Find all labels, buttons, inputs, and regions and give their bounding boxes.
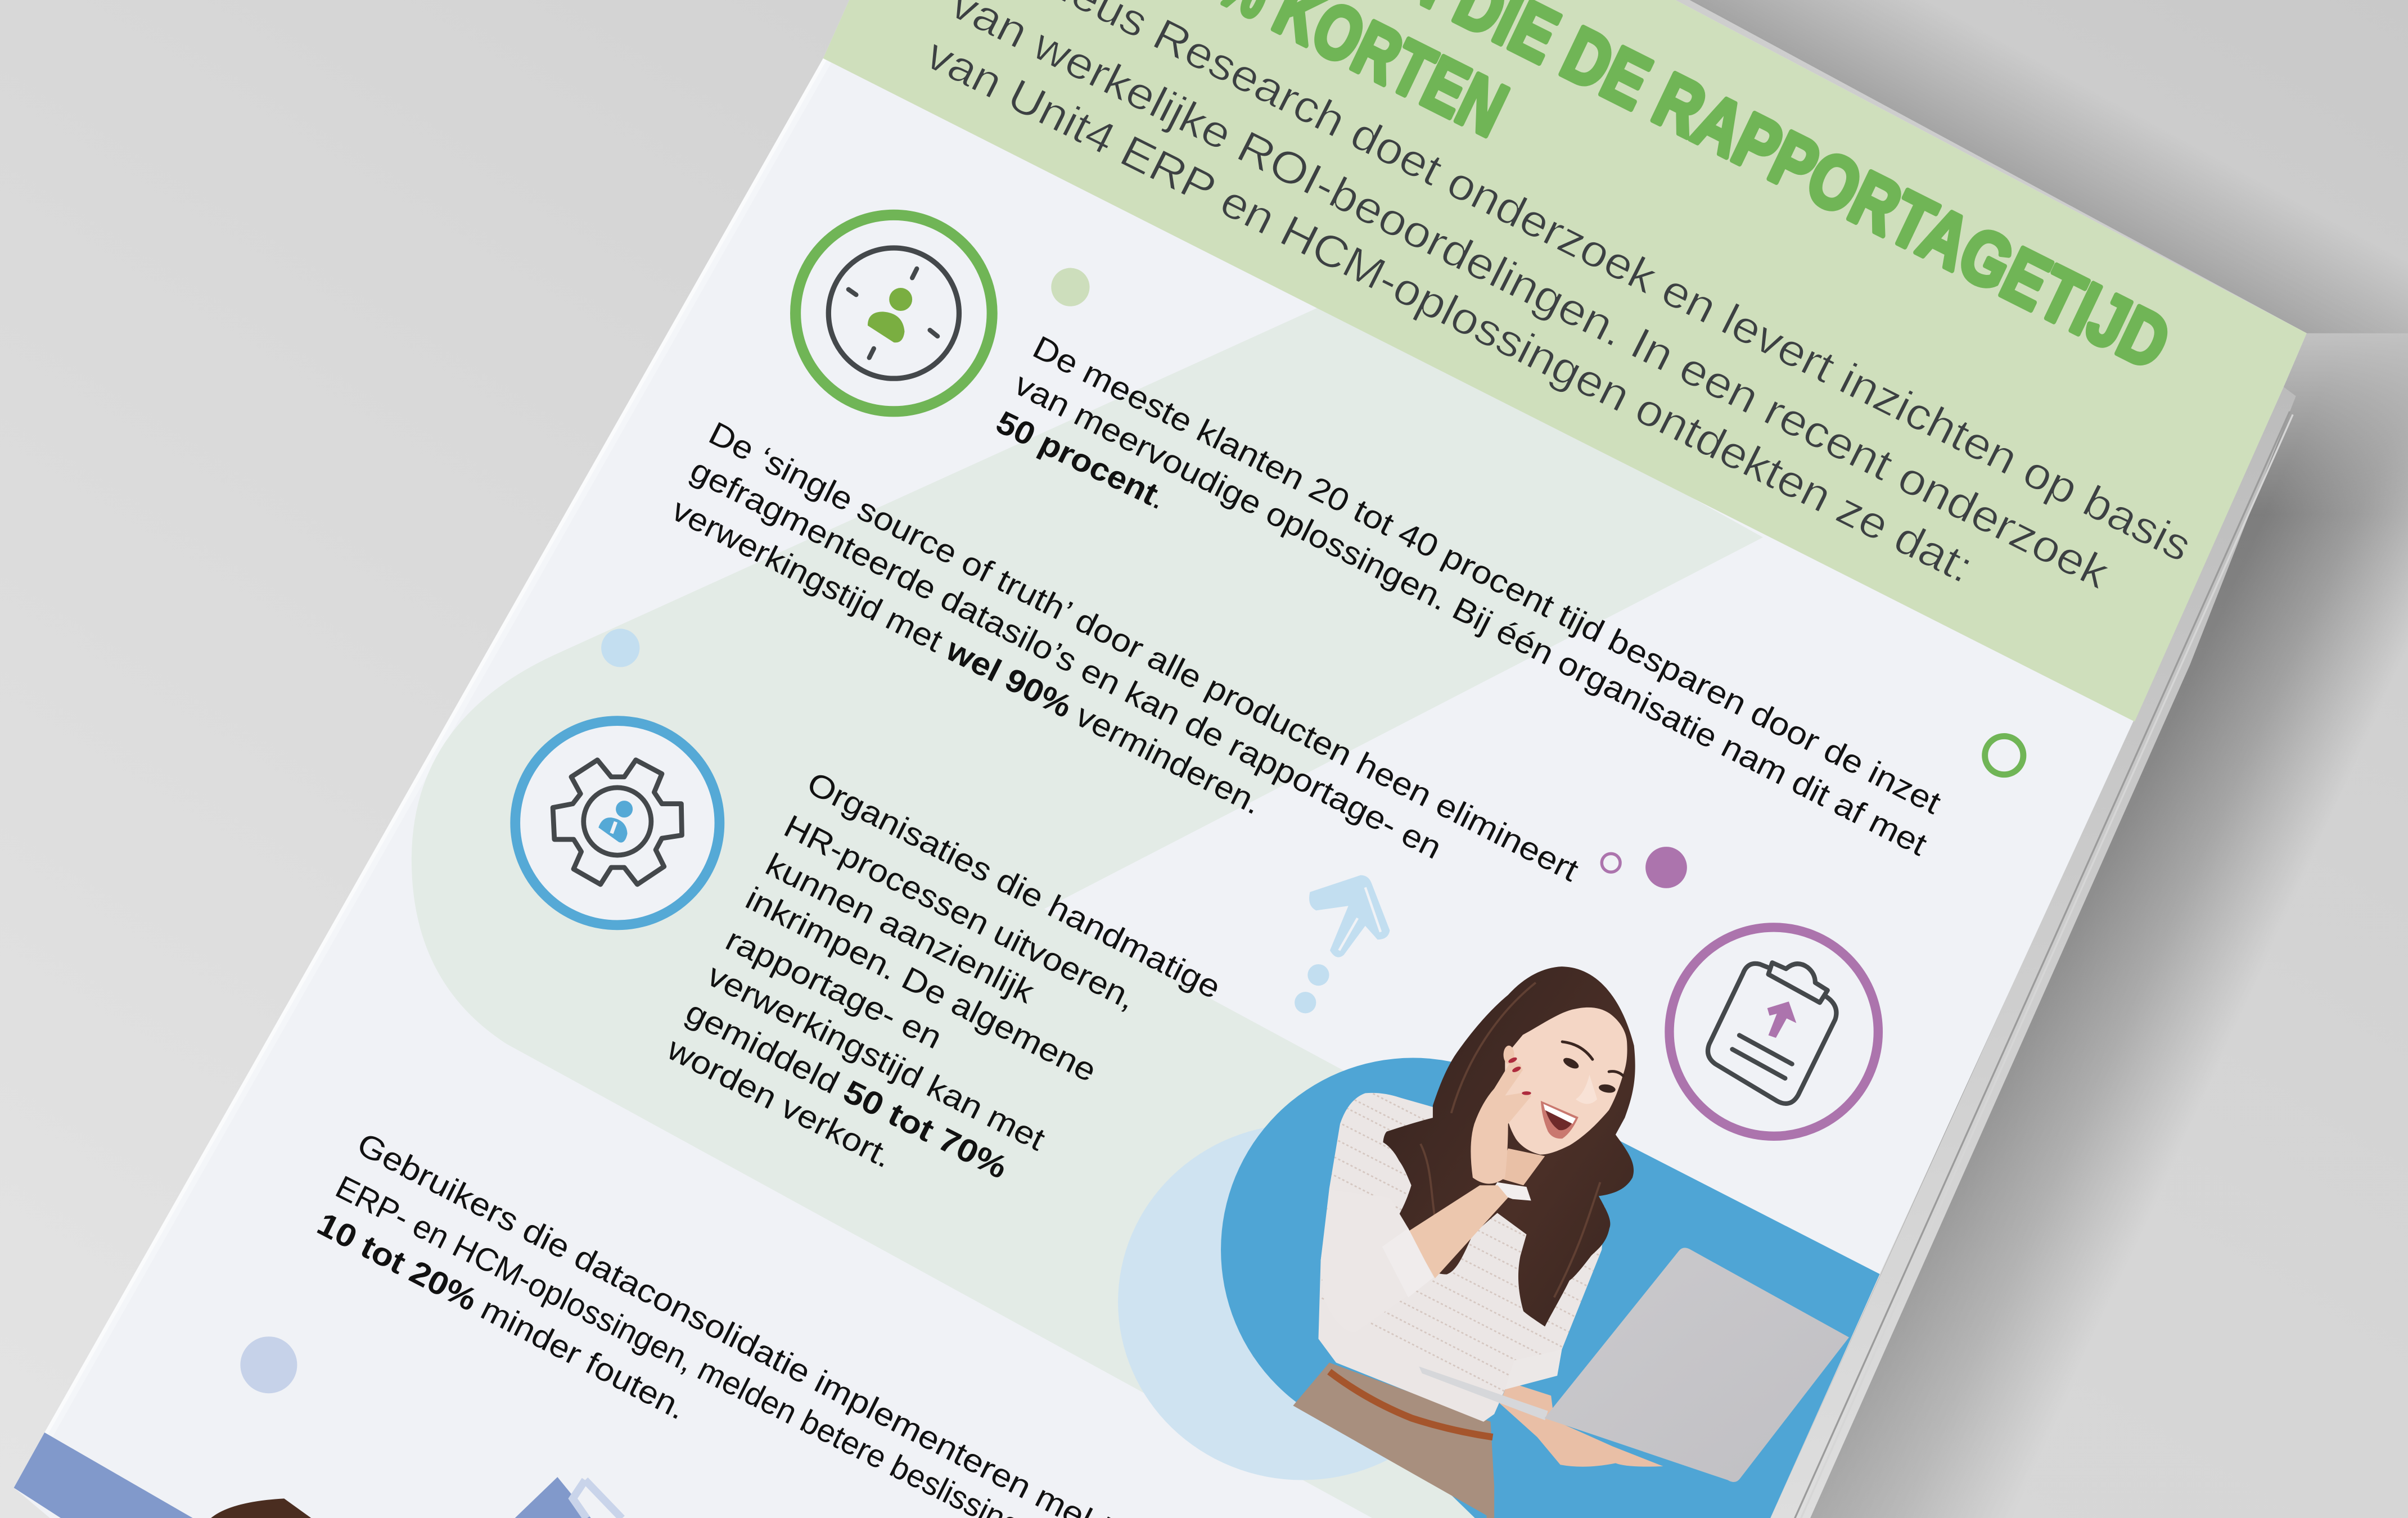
- decorative ring green: [1985, 736, 2023, 775]
- text block: handmatige HR-processen: [661, 765, 1226, 1186]
- text block: single source of truth: verwerkingstijd met wel 90% verminderen.: [666, 492, 1268, 821]
- hair: [1383, 966, 1635, 1326]
- laptop base: [1419, 1366, 1548, 1420]
- tinted diagonal background band: [412, 300, 1763, 1518]
- decorative dot green: [1051, 268, 1090, 306]
- text block: handmatige HR-processen: Organisaties die handmatige: [801, 765, 1226, 1006]
- decorative dot periwinkle: [240, 1336, 297, 1393]
- icon: clock with person: [796, 215, 992, 412]
- belt: [1329, 1372, 1492, 1437]
- icon: gear with person: [515, 721, 719, 925]
- collar: [1491, 1182, 1531, 1201]
- stacked pages edge: [1766, 387, 2296, 1518]
- hair highlights: [1421, 983, 1600, 1298]
- text block: handmatige HR-processen: worden verkort.: [661, 1031, 898, 1175]
- text block: handmatige HR-processen: verwerkingstijd kan met: [702, 957, 1050, 1158]
- sleeve cuff: [1321, 1190, 1433, 1332]
- text block: dataconsolidatie: 10 tot 20% minder fouten.: [312, 1206, 692, 1427]
- icon: light-blue arrow with bubbles: [1295, 875, 1390, 1013]
- text block: handmatige HR-processen: kunnen aanzienlijk: [760, 847, 1040, 1010]
- text block: klanten: 50 procent.: [990, 404, 1173, 517]
- hand at cheek: [1471, 1059, 1531, 1183]
- nose shadow: [1576, 1075, 1597, 1104]
- drop shadow of brochure: [1675, 0, 2408, 1518]
- text block: dataconsolidatie: Gebruikers die dataconsolidatie implementeren melden: [351, 1126, 1151, 1518]
- mouth: [1541, 1101, 1579, 1138]
- nails: [1508, 1056, 1531, 1095]
- bottom-left periwinkle band: [14, 1433, 193, 1518]
- text block: handmatige HR-processen: inkrimpen. De algemene: [740, 880, 1102, 1089]
- text block: single source of truth: gefragmenteerde datasilo’s en kan de rapportage- en: [685, 452, 1447, 866]
- ear: [1504, 1046, 1514, 1064]
- text block: single source of truth: De ‘single source of truth’ door alle producten heen elimineert: [703, 415, 1584, 889]
- light-blue circle behind woman: [1118, 1124, 1486, 1480]
- eyes: [1562, 1056, 1616, 1094]
- sweater knit texture: [1319, 1093, 1599, 1392]
- laptop lid: [1544, 1248, 1849, 1482]
- title: [1043, 0, 2182, 386]
- text block: klanten: De meeste klanten 20 tot 40 procent tijd besparen door de inzet: [1027, 329, 1946, 821]
- cuff band: [1382, 1228, 1433, 1298]
- text block: handmatige HR-processen: gemiddeld 50 tot 70%: [680, 994, 1013, 1186]
- brows: [1562, 1042, 1624, 1076]
- forearm: [1408, 1185, 1508, 1278]
- text block: handmatige HR-processen: rapportage- en: [720, 921, 948, 1056]
- icon: clipboard with arrow: [1669, 927, 1878, 1136]
- sweater: [1318, 1093, 1605, 1422]
- trousers: [1293, 1363, 1494, 1518]
- photo: woman with laptop: [1293, 966, 1849, 1518]
- page left highlight: [14, 58, 823, 1488]
- decorative dot purple: [1645, 847, 1687, 888]
- arm under laptop: [1500, 1382, 1663, 1467]
- face: [1505, 1008, 1627, 1155]
- green header band: [823, 0, 2307, 722]
- text block: klanten: van meervoudige oplossingen. Bij één organisatie nam dit af met: [1009, 366, 1932, 863]
- decorative ring purple: [1602, 853, 1620, 872]
- second sleeve: [1505, 1349, 1562, 1389]
- decorative dot blue: [601, 629, 639, 667]
- blue circle and band behind woman: [1221, 1058, 1904, 1518]
- intro paragraph: van Unit4 ERP en HCM-oplossingen ontdekten ze dat:: [919, 28, 1981, 593]
- folder icon at bottom: [515, 1477, 622, 1518]
- neck: [1498, 1149, 1545, 1185]
- text block: handmatige HR-processen: HR-processen uitvoeren,: [778, 808, 1142, 1017]
- hair of person at bottom: [210, 1498, 312, 1518]
